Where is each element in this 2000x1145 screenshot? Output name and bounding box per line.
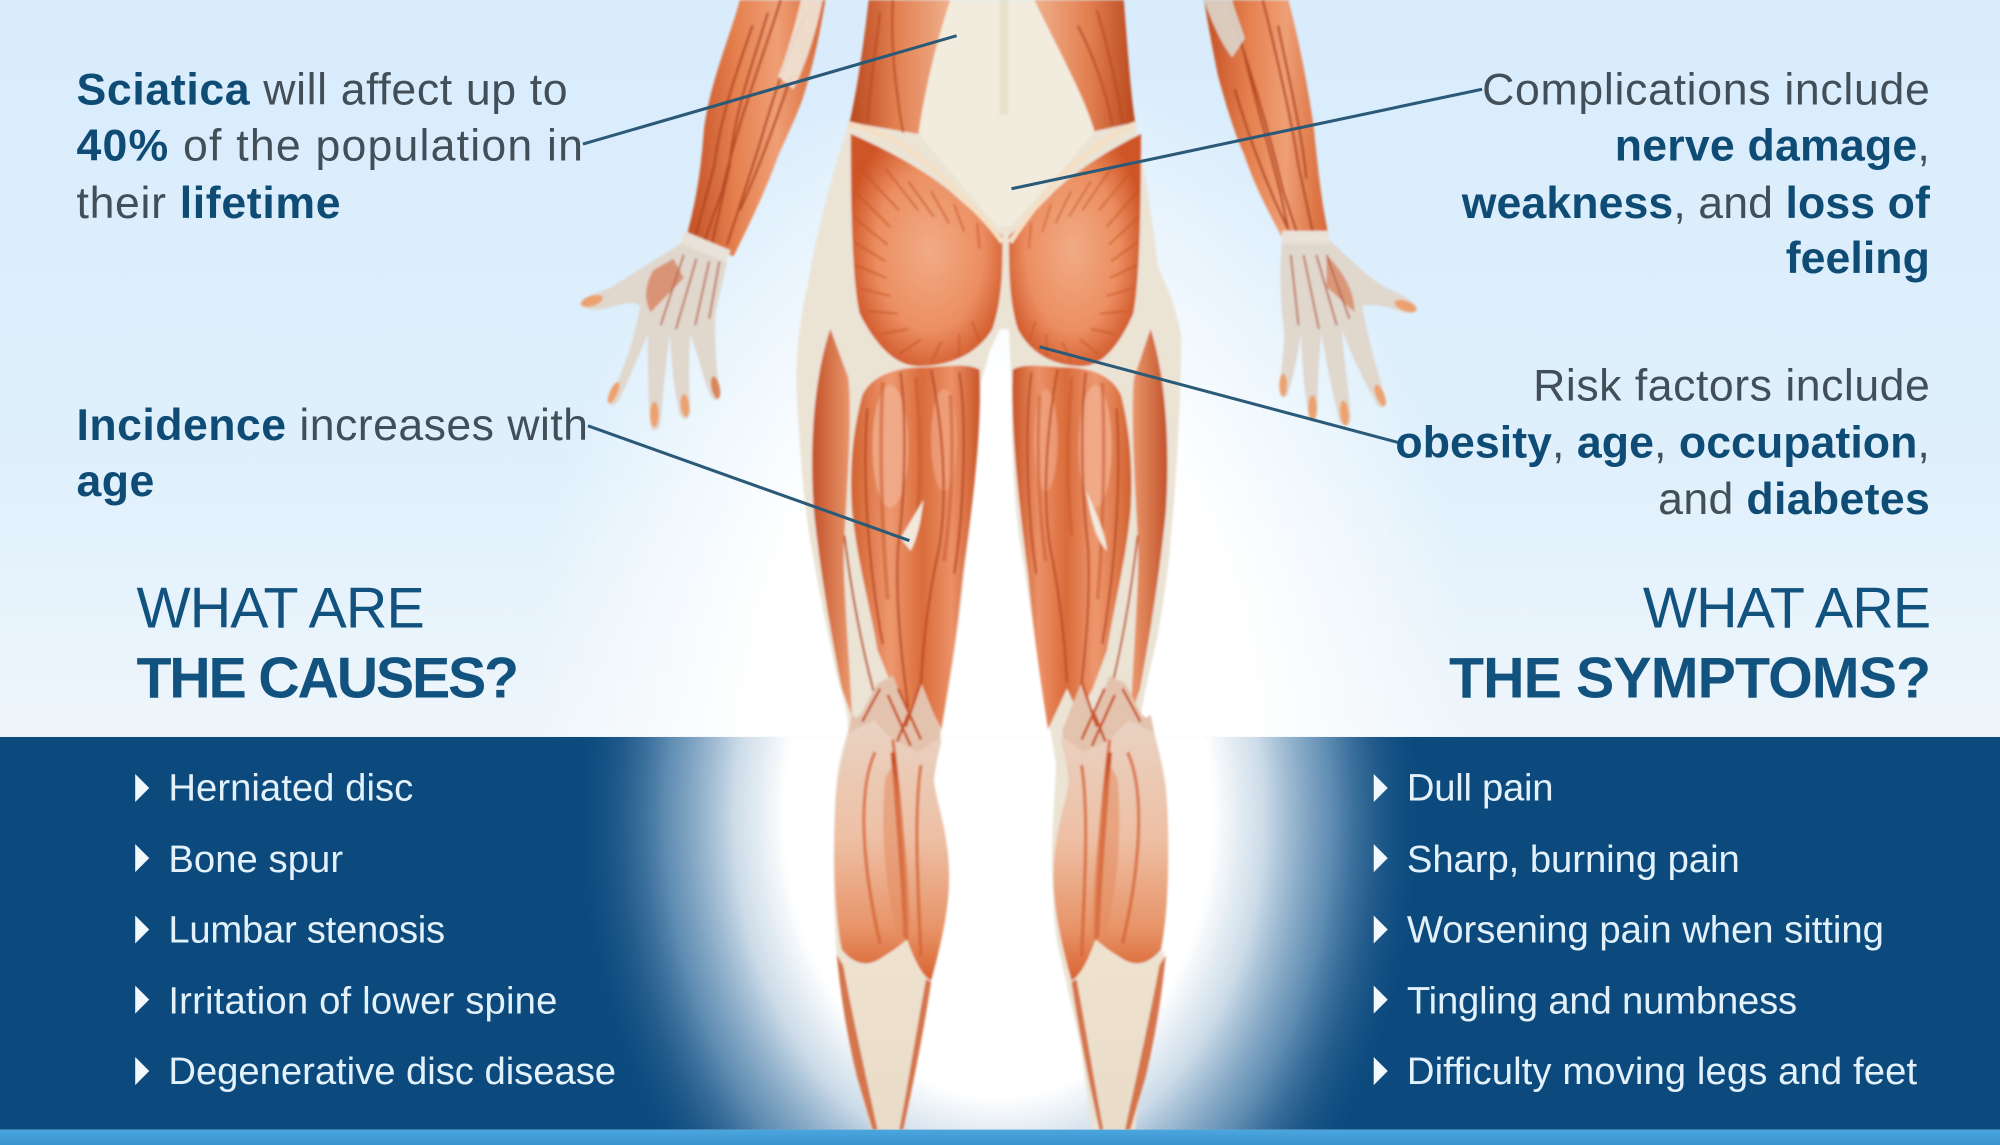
callout: incidence: Incidence increases with — [77, 401, 588, 450]
left arm — [686, 0, 825, 256]
callout: sciatica prevalence: 40% of the population in — [77, 122, 583, 171]
callout: complications: nerve damage, — [1615, 122, 1930, 171]
lumbar fascia — [918, 0, 1094, 227]
callout: risk factors: Risk factors include — [1533, 361, 1930, 410]
bottom stripe — [0, 1130, 2000, 1145]
heading: symptoms: THE SYMPTOMS? — [1449, 646, 1931, 710]
left hand — [579, 237, 728, 430]
gluteal muscles — [851, 134, 1141, 366]
right hand — [1279, 237, 1418, 426]
callout: incidence: age — [77, 457, 154, 506]
left thigh muscles — [812, 329, 980, 729]
callout: risk factors: obesity, age, occupation, — [1395, 419, 1930, 468]
left hamstring tendon — [901, 500, 923, 551]
list: causes: Herniated disc — [168, 767, 413, 810]
callout: risk factors — [1395, 361, 1930, 524]
callout leader lines — [583, 36, 1482, 541]
callout: incidence — [77, 401, 588, 506]
list: symptoms — [1374, 767, 1917, 1093]
callout: sciatica prevalence: their lifetime — [77, 179, 341, 228]
list: symptoms: Tingling and numbness — [1407, 980, 1797, 1023]
callout: risk factors: and diabetes — [1658, 475, 1930, 524]
list: symptoms: Sharp, burning pain — [1407, 838, 1740, 881]
heading: symptoms — [1449, 576, 1931, 710]
list: symptoms: Worsening pain when sitting — [1407, 908, 1884, 951]
right hamstring tendon — [1087, 491, 1107, 551]
list: causes: Bone spur — [168, 838, 343, 881]
callout: complications: weakness, and loss of — [1461, 179, 1930, 228]
left lower leg — [834, 676, 949, 1130]
list: causes — [135, 767, 616, 1093]
callout: complications: feeling — [1786, 234, 1930, 283]
list: causes: Lumbar stenosis — [168, 908, 445, 951]
hip band — [848, 124, 1135, 242]
right lower leg — [1053, 676, 1168, 1130]
heading: causes: WHAT ARE — [136, 576, 425, 640]
illustration: human muscular system, back view — [579, 0, 1418, 1130]
list: causes: Irritation of lower spine — [168, 980, 557, 1023]
callout: complications: Complications include — [1482, 66, 1930, 115]
list: symptoms: Difficulty moving legs and feet — [1407, 1050, 1917, 1093]
callout: sciatica prevalence — [77, 66, 583, 228]
callout: complications — [1461, 66, 1930, 283]
list: symptoms: Dull pain — [1407, 767, 1554, 810]
heading: causes: THE CAUSES? — [136, 646, 519, 710]
heading: symptoms: WHAT ARE — [1643, 576, 1931, 640]
body silhouette — [796, 0, 1181, 1130]
list: causes: Degenerative disc disease — [168, 1050, 616, 1093]
back muscles — [849, 0, 1135, 134]
right arm — [1204, 0, 1329, 237]
callout: sciatica prevalence: Sciatica will affect up to — [77, 66, 568, 115]
heading: causes — [136, 576, 519, 710]
dark blue list band — [0, 737, 2000, 1130]
right thigh muscles — [1012, 329, 1167, 729]
